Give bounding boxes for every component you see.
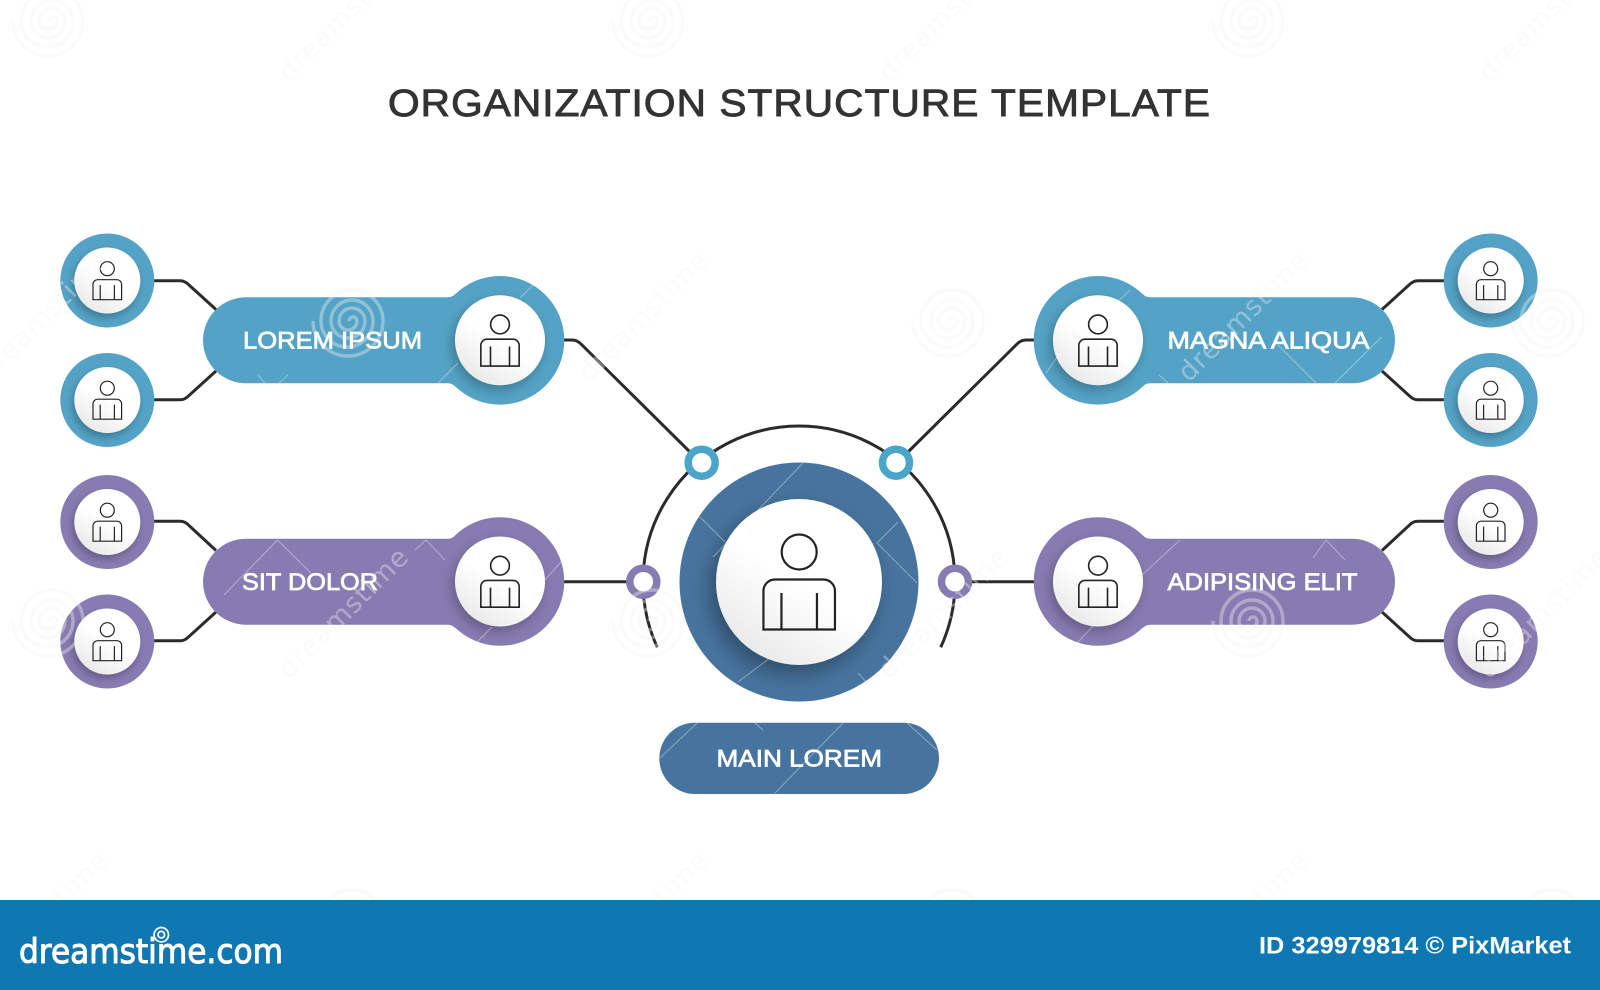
main label pill: MAIN LOREM	[716, 746, 882, 772]
watermark overlay: dreamstime	[572, 844, 716, 988]
small member icons: teal, left	[60, 234, 154, 447]
watermark overlay: dreamstime	[1172, 244, 1316, 388]
small member icons: teal, right	[1444, 234, 1538, 447]
watermark overlay: dreamstime	[872, 541, 1016, 685]
watermark overlay: dreamstime	[272, 541, 416, 685]
node: Adipising Elit	[1034, 517, 1395, 646]
watermark overlay: dreamstime	[572, 244, 716, 388]
node: Sit Dolor	[203, 517, 564, 646]
node: Magna Aliqua	[1034, 276, 1395, 405]
title: ORGANIZATION STRUCTURE TEMPLATE	[388, 83, 1211, 125]
footer logo: dreamstime.com	[19, 932, 283, 972]
node: Lorem Ipsum: LOREM IPSUM	[243, 328, 422, 354]
small member icons: purple, left	[60, 475, 154, 688]
watermark overlay: dreamstime	[1172, 844, 1316, 988]
connectors: all branches	[154, 281, 1444, 647]
node: Adipising Elit: ADIPISING ELIT	[1168, 569, 1358, 596]
small member icons: purple, right	[1444, 475, 1538, 688]
footer credit: ID 329979814 © PixMarket	[1259, 932, 1571, 960]
footer bar	[0, 900, 1600, 990]
node: Magna Aliqua: MAGNA ALIQUA	[1168, 328, 1370, 354]
main label pill	[659, 723, 939, 794]
node: Sit Dolor: SIT DOLOR	[242, 569, 378, 596]
central main node	[680, 462, 918, 702]
node: Lorem Ipsum	[203, 276, 564, 405]
connector rings on the arc	[630, 449, 968, 595]
